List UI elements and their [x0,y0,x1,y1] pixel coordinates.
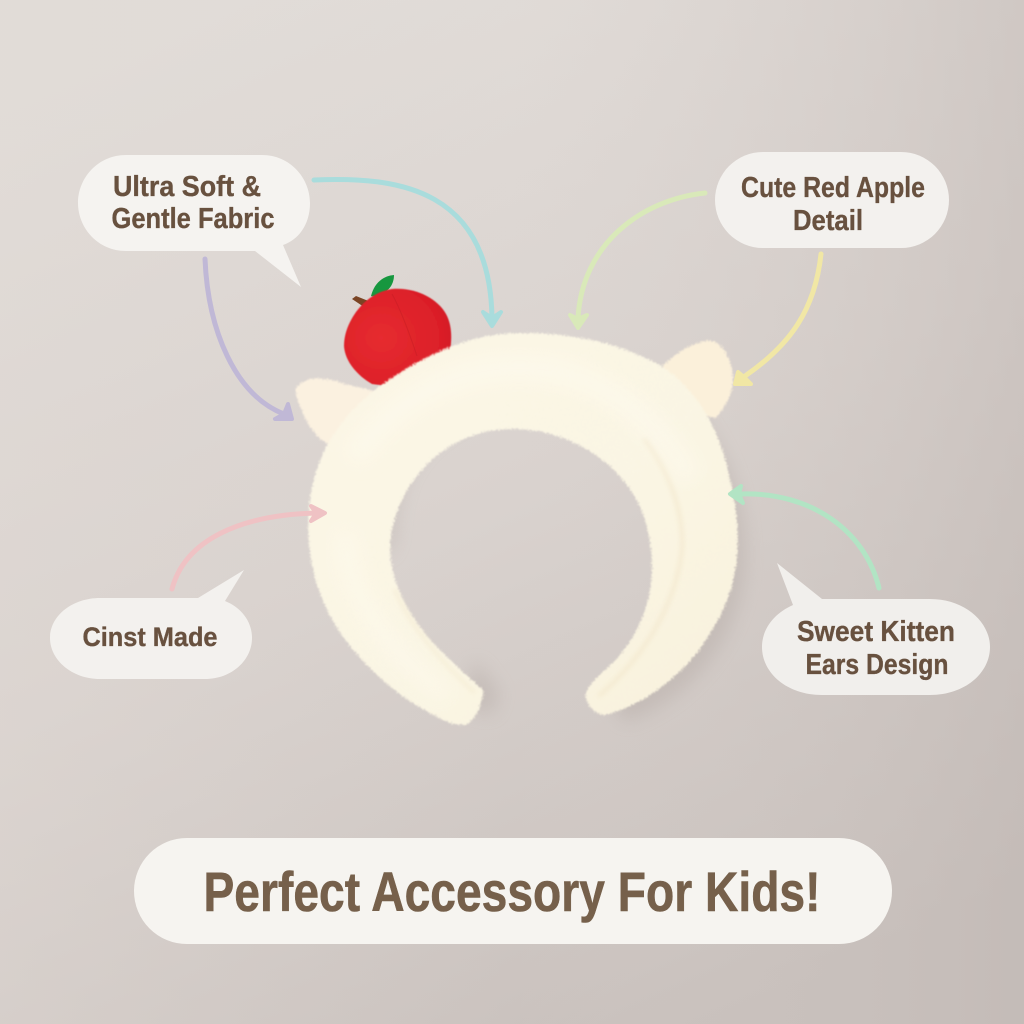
callout: sweet kitten ears design: Ears Design [806,649,948,681]
headband body [308,333,738,725]
apple body [344,289,451,387]
arrow: mint [730,486,879,588]
left ear [296,378,378,448]
arrow: teal [314,179,501,326]
callout: cute red apple detail [715,152,949,248]
callout: cute red apple detail: Cute Red Apple [741,172,925,204]
apple [344,275,451,387]
headband shadow [383,374,746,722]
callout: sweet kitten ears design: Sweet Kitten [797,616,955,648]
callout: cinst made: Cinst Made [82,622,218,652]
headband product [296,275,746,725]
arrow: light green [570,193,705,328]
fur shading [345,368,685,695]
callout: cinst made [50,570,252,679]
title banner [134,838,892,944]
callout: ultra soft fabric [78,155,310,287]
callout: sweet kitten ears design [762,563,990,695]
apple leaf [371,275,394,296]
arrow: lavender [205,259,292,419]
title banner: Perfect Accessory For Kids! [204,860,820,923]
arrow: pink [172,506,325,589]
callout: ultra soft fabric: Ultra Soft & [113,171,261,203]
callout: ultra soft fabric: Gentle Fabric [112,203,274,235]
right ear [662,341,733,418]
arrow: yellow [735,254,821,384]
callout: cute red apple detail: Detail [793,205,863,237]
apple stem [352,296,371,309]
